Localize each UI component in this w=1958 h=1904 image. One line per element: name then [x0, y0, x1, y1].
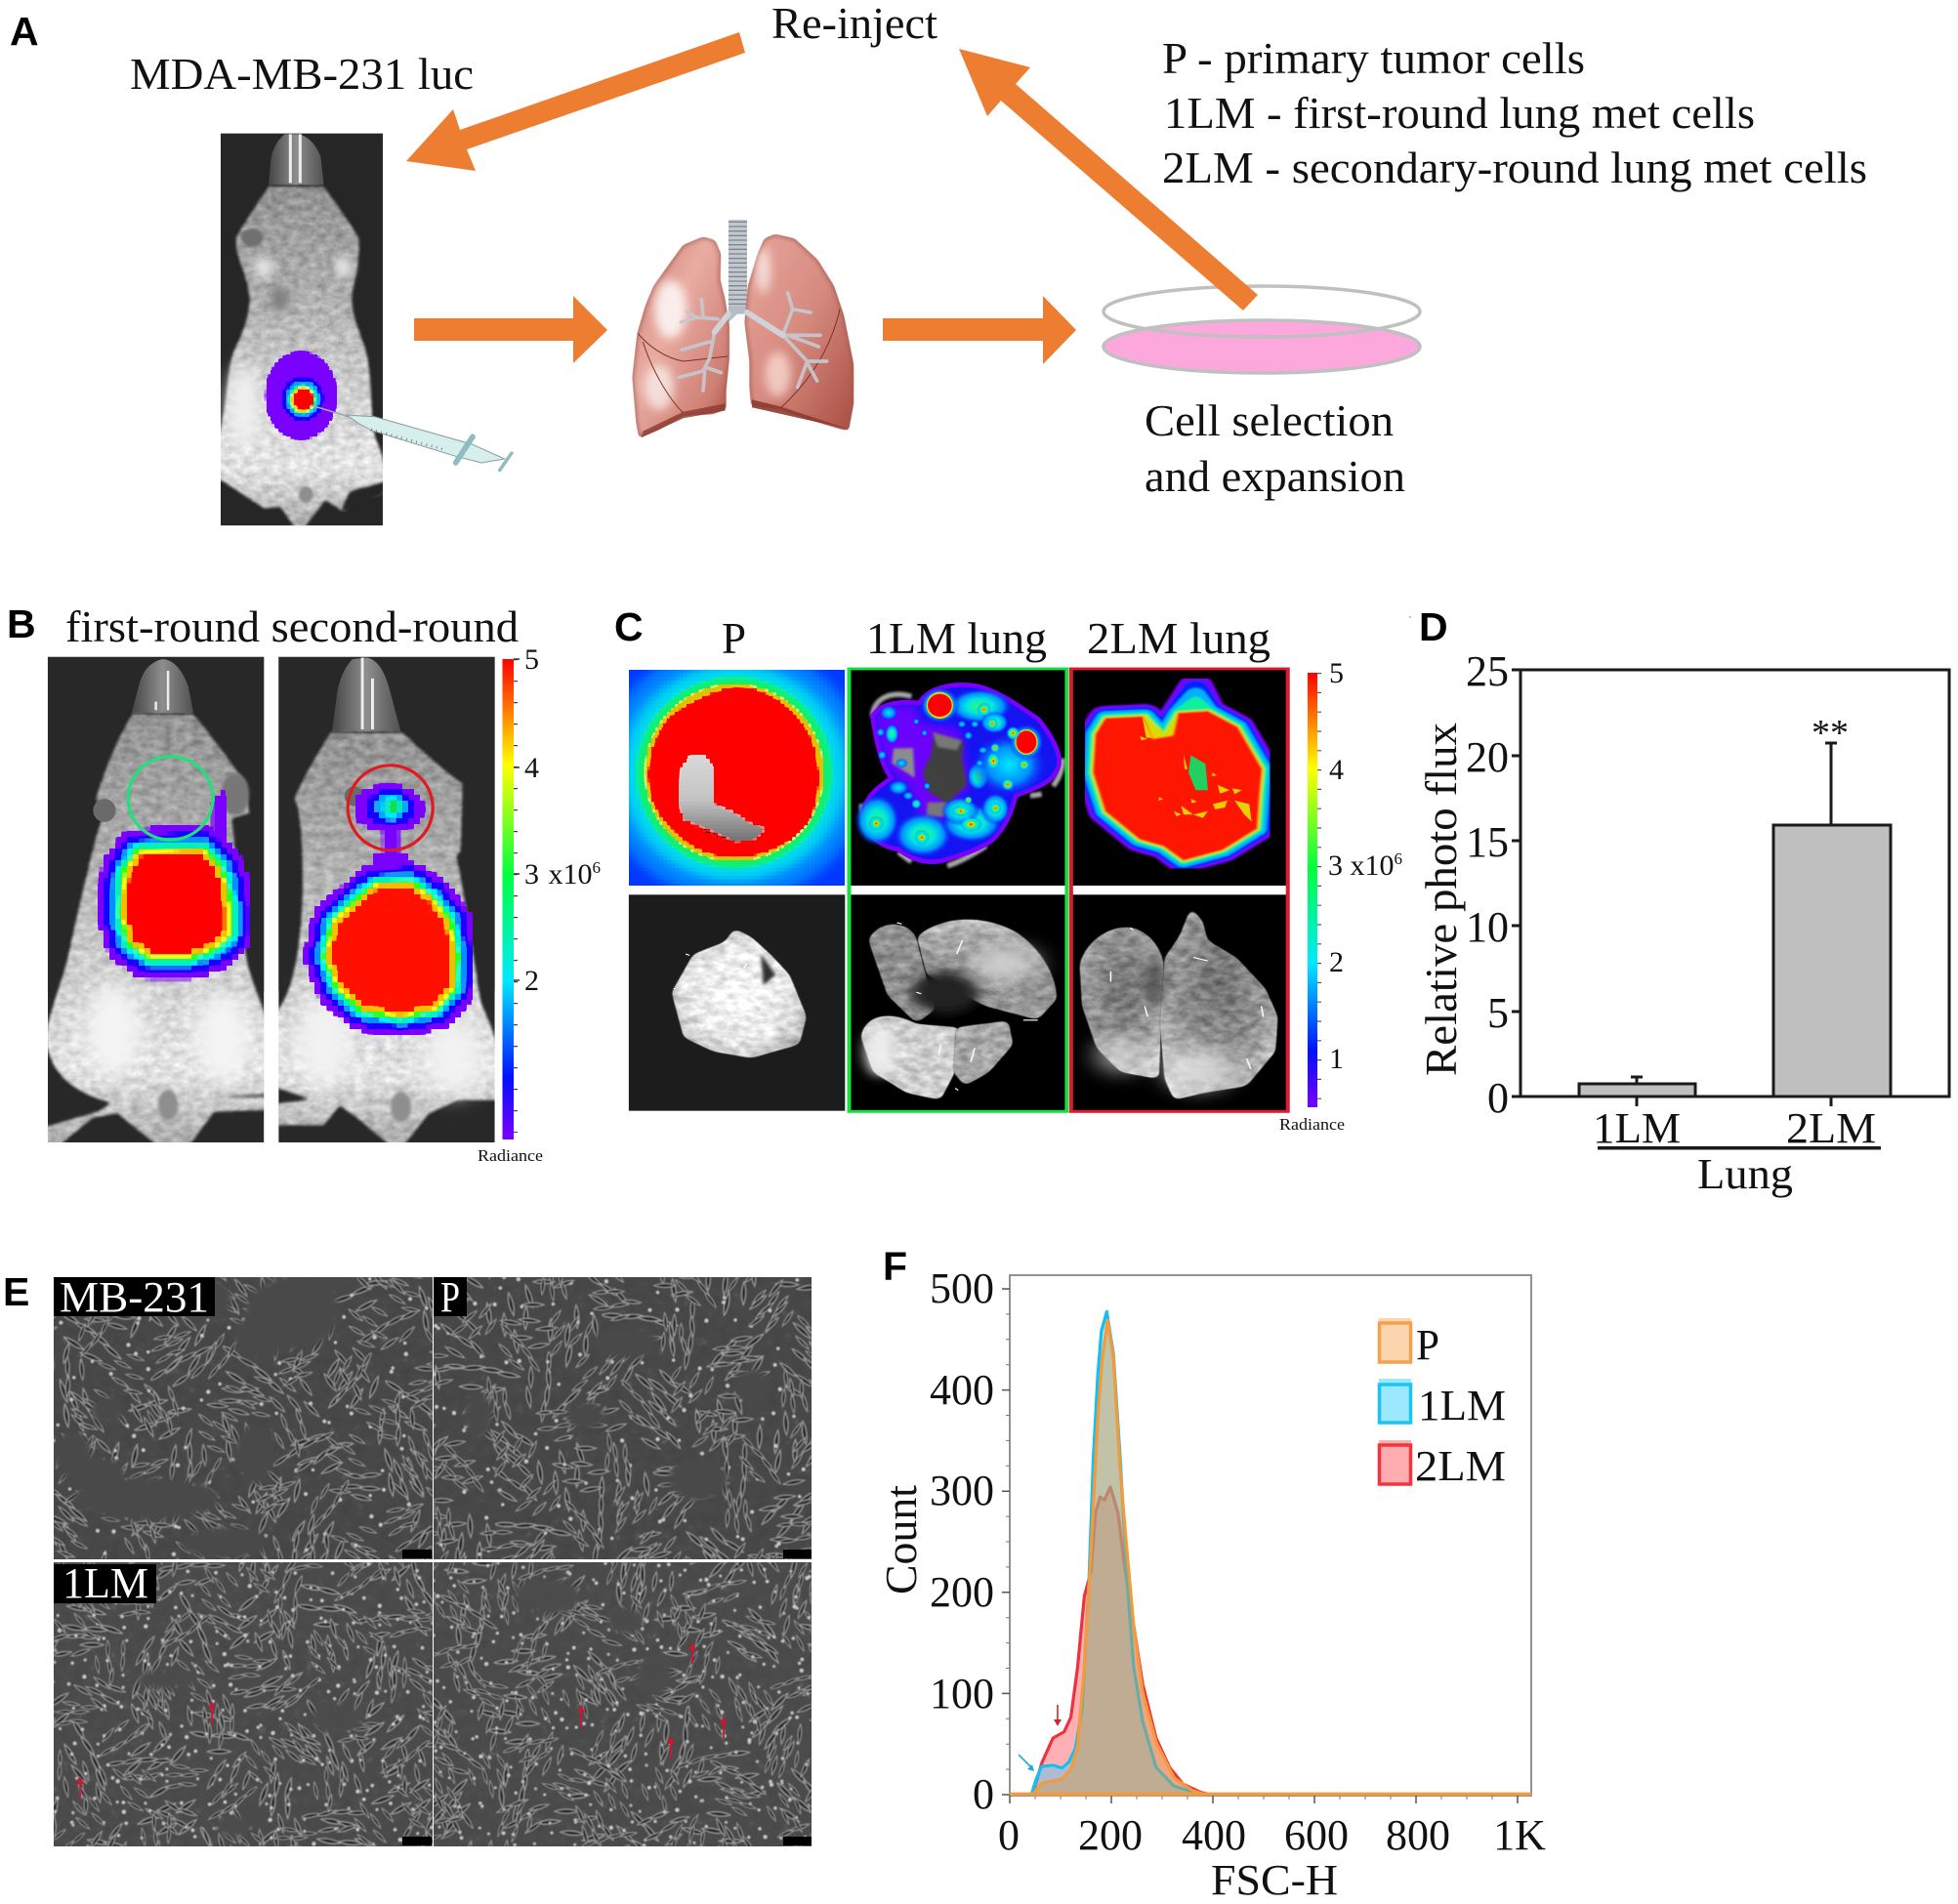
- bronchi: [679, 293, 827, 391]
- panel letter E: E: [3, 1269, 29, 1314]
- y axis tick labels: 25: [1466, 647, 1509, 695]
- ROI circle: green: [128, 757, 213, 840]
- colour bar C: 5: [1329, 657, 1344, 689]
- panel B: mouse bioluminescence rounds: [7, 601, 601, 1165]
- legend text: cell abbreviations: 2LM - secondary-round lung met cells: [1162, 143, 1867, 192]
- heat map: second-round signal: [328, 785, 453, 1014]
- image: 2LM lung signal and photo: [1071, 669, 1288, 1111]
- caption: cell selection and expansion: and expansion: [1145, 451, 1405, 501]
- x axis title: FSC-H: [1211, 1856, 1338, 1904]
- x axis tick labels: 1K: [1493, 1811, 1546, 1859]
- strong metastasis foci: [920, 687, 1044, 761]
- y axis tick labels: 200: [930, 1568, 994, 1616]
- caption: cell selection and expansion: Cell selection: [1145, 395, 1394, 445]
- y axis tick labels: 20: [1466, 733, 1509, 781]
- colour bar C: 1: [1329, 1043, 1344, 1075]
- image: 1LM lung signal and photo: [849, 669, 1066, 1111]
- error bars: [1631, 743, 1837, 1084]
- heat map: first-round signal: [123, 791, 229, 955]
- colour bar C: [1279, 657, 1402, 1134]
- arrow: red, 2LM small population: [1054, 1705, 1062, 1726]
- image: second-round mouse: [270, 657, 506, 1149]
- curve: P: [1033, 1320, 1205, 1795]
- central tissue gap: [923, 734, 967, 804]
- label: MB-231: MB-231: [60, 1273, 209, 1321]
- colour bar B: 2: [524, 965, 539, 997]
- colour bar C: Radiance: [1279, 1115, 1345, 1134]
- caption: cell selection and expansion: [1145, 395, 1405, 501]
- label: 1LM: 1LM: [62, 1559, 148, 1607]
- legend item: 1LM: [1379, 1379, 1506, 1429]
- image: P tumor photo: [629, 894, 845, 1111]
- tissue hole: [679, 755, 766, 843]
- arrow: lung to dish: [883, 296, 1076, 364]
- column headings: P: [722, 613, 746, 663]
- colour bar C: 2: [1329, 946, 1344, 978]
- y axis tick labels: [930, 1264, 994, 1818]
- histogram curves: [1010, 1311, 1531, 1795]
- legend item: 2LM: 2LM: [1415, 1442, 1506, 1490]
- y axis tick labels: 300: [930, 1467, 994, 1514]
- image: first-round mouse: [40, 657, 275, 1149]
- colour bar B: 5: [524, 643, 539, 676]
- bar: 2LM: [1773, 825, 1891, 1097]
- heading: first-round second-round: first-round second-round: [65, 601, 519, 651]
- legend text: cell abbreviations: [1162, 33, 1867, 192]
- curve: 2LM: [1033, 1487, 1210, 1795]
- panel A: experimental workflow: [10, 0, 1867, 532]
- y axis tick labels: 10: [1466, 903, 1509, 951]
- legend: [1379, 1318, 1506, 1490]
- column headings: 1LM lung: [866, 613, 1047, 663]
- label: P: P: [440, 1273, 460, 1321]
- legend item: P: P: [1416, 1321, 1439, 1369]
- legend item: 1LM: 1LM: [1418, 1382, 1506, 1429]
- micrograph: 2LM: [434, 1562, 812, 1846]
- legend item: 2LM: [1379, 1440, 1506, 1490]
- column headings: [722, 613, 1271, 663]
- panel E: cell morphology micrographs: [3, 1264, 812, 1846]
- panel letter C: C: [614, 604, 644, 649]
- plot frame: [1521, 670, 1949, 1097]
- y axis tick labels: 0: [973, 1770, 994, 1818]
- micrograph: P: [434, 1277, 812, 1559]
- legend item: P: [1379, 1318, 1439, 1369]
- left lung: [633, 237, 729, 436]
- panel letter F: F: [883, 1244, 907, 1289]
- y axis title: Count: [876, 1485, 926, 1594]
- panel letter B: B: [7, 601, 36, 646]
- panel D: relative photon flux bar chart: [1409, 604, 1949, 1198]
- x axis labels: Lung: [1697, 1150, 1793, 1198]
- arrow: dish to re-inject: [959, 49, 1258, 310]
- panel F: flow cytometry histogram: [876, 1244, 1546, 1904]
- x axis tick labels: 600: [1284, 1811, 1349, 1859]
- label: MDA-MB-231 luc: MDA-MB-231 luc: [130, 49, 474, 99]
- image: mouse with primary tumor: [212, 134, 391, 532]
- heat spot: primary tumor signal: [266, 352, 337, 439]
- 2LM lung photo: [1079, 907, 1278, 1100]
- colour bar B: [478, 643, 601, 1165]
- legend text: cell abbreviations: P - primary tumor cells: [1162, 33, 1585, 83]
- arrow: cyan, 1LM small population: [1019, 1755, 1034, 1771]
- bar: 1LM: [1579, 1084, 1695, 1097]
- 1LM heat map: [854, 684, 1062, 866]
- colour bar B: 3 x10: [524, 858, 592, 890]
- y axis tick labels: 400: [930, 1366, 994, 1414]
- colour bar B: 4: [524, 752, 539, 784]
- x axis tick labels: 0: [998, 1811, 1020, 1859]
- x axis labels: 2LM: [1786, 1104, 1876, 1152]
- colour bar B: 6: [592, 858, 601, 877]
- image: P tumor signal: [629, 670, 845, 886]
- micrograph: MB-231: [54, 1264, 433, 1559]
- internal low-signal specks: [1140, 717, 1252, 821]
- y axis tick labels: [1466, 647, 1509, 1122]
- x axis tick labels: 200: [1078, 1811, 1143, 1859]
- trachea: [729, 220, 747, 322]
- y axis tick labels: 100: [930, 1670, 994, 1718]
- y axis title: Relative photo flux: [1416, 723, 1466, 1076]
- x axis labels: [1593, 1104, 1881, 1198]
- panel letter A: A: [10, 9, 39, 54]
- icon: lungs: [633, 220, 853, 437]
- 2LM heat map: [1094, 687, 1262, 860]
- y axis tick labels: 0: [1487, 1074, 1509, 1122]
- legend text: cell abbreviations: 1LM - first-round lung met cells: [1164, 88, 1755, 138]
- right lung: [745, 235, 853, 430]
- arrow: re-inject to mouse: [406, 32, 745, 171]
- red arrows marking rounded cells: [76, 1642, 728, 1799]
- x axis labels: 1LM: [1593, 1104, 1681, 1152]
- y axis tick labels: 5: [1487, 989, 1509, 1037]
- 1LM lung photo: [860, 919, 1058, 1100]
- panel C: ex vivo tissue imaging: [601, 604, 1402, 1134]
- colour bar C: 4: [1329, 754, 1344, 786]
- x axis tick labels: [998, 1811, 1546, 1859]
- icon: syringe: [311, 405, 512, 471]
- panel letter D: D: [1419, 604, 1448, 649]
- y axis tick labels: 15: [1466, 818, 1509, 866]
- colour bar C: 3 x10: [1328, 849, 1395, 882]
- icon: culture dish: [1104, 286, 1420, 373]
- colour bar B: Radiance: [478, 1146, 543, 1165]
- column headings: 2LM lung: [1087, 613, 1271, 663]
- ROI circle: red: [348, 766, 433, 850]
- arrow: mouse to lung: [414, 296, 607, 363]
- colour bar C: 6: [1395, 849, 1402, 868]
- x axis tick labels: 800: [1386, 1811, 1450, 1859]
- curve: 1LM: [1031, 1311, 1201, 1795]
- plot frame and ticks: [1002, 1275, 1531, 1803]
- x axis tick labels: 400: [1182, 1811, 1246, 1859]
- y axis tick labels: 500: [930, 1264, 994, 1312]
- micrograph: 1LM: [54, 1562, 433, 1846]
- significance stars: **: [1812, 713, 1849, 754]
- purple low-signal area: [876, 703, 970, 820]
